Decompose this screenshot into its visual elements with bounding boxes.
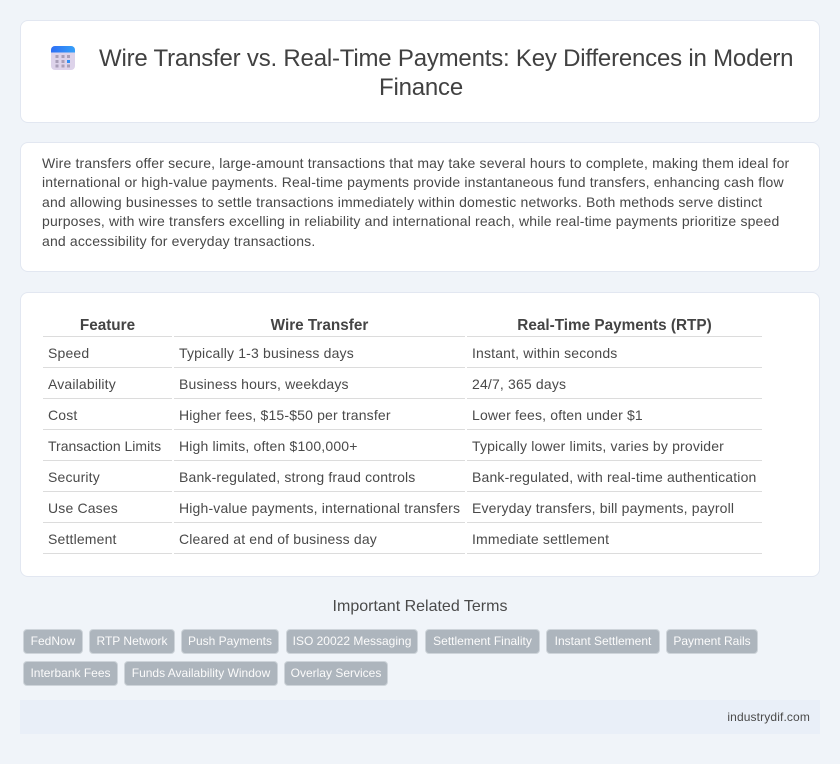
comparison table: High limits, often $100,000+ (179, 438, 358, 454)
comparison table: Wire Transfer (271, 317, 368, 334)
comparison table: Availability (48, 376, 116, 392)
comparison table: Transaction Limits (48, 438, 161, 454)
related terms tags: ISO 20022 Messaging (293, 634, 411, 648)
comparison table: Security (48, 469, 100, 485)
comparison table: Typically lower limits, varies by provider (472, 438, 724, 454)
comparison table: Everyday transfers, bill payments, payroll (472, 500, 734, 516)
comparison table: Instant, within seconds (472, 345, 617, 361)
comparison table: Real-Time Payments (RTP) (517, 317, 712, 334)
comparison table: Cleared at end of business day (179, 531, 377, 547)
text block: intro paragraph: Wire transfers offer secure, large-amount transactions that may take several hours to complete, making them ideal for (42, 155, 789, 171)
footer (20, 700, 820, 734)
comparison table: Bank-regulated, with real-time authentication (472, 469, 756, 485)
icon: calendar (51, 46, 75, 70)
comparison table: Settlement (48, 531, 117, 547)
comparison table: Speed (48, 345, 89, 361)
comparison table: Bank-regulated, strong fraud controls (179, 469, 415, 485)
text block: intro paragraph: and allowing businesses to settle transactions immediately within domestic networks. Both methods serve distinct (42, 194, 762, 210)
related terms tags: Overlay Services (291, 666, 381, 680)
panel: comparison table (20, 292, 820, 577)
text block: intro paragraph: and accessibility for everyday transactions. (42, 233, 315, 249)
panel: intro text (20, 142, 820, 272)
footer source text: industrydif.com (727, 710, 810, 724)
related terms tags: Funds Availability Window (132, 666, 270, 680)
text block: intro paragraph (42, 155, 789, 249)
related terms tags: RTP Network (97, 634, 167, 648)
comparison table: Lower fees, often under $1 (472, 407, 643, 423)
comparison table: Business hours, weekdays (179, 376, 349, 392)
related terms tags: Interbank Fees (30, 666, 111, 680)
title (99, 45, 793, 101)
title: Wire Transfer vs. Real-Time Payments: Key Differences in Modern (99, 45, 793, 72)
related terms tags: FedNow (31, 634, 75, 648)
heading: related terms: Important Related Terms (333, 598, 507, 615)
comparison table: Immediate settlement (472, 531, 609, 547)
comparison table (43, 317, 762, 554)
comparison table: Cost (48, 407, 77, 423)
text block: intro paragraph: purposes, with wire transfers excelling in reliability and international reach, while real-time payments prioritize speed (42, 213, 779, 229)
title: Finance (379, 74, 463, 101)
comparison table: 24/7, 365 days (472, 376, 566, 392)
related terms tags: Push Payments (188, 634, 272, 648)
comparison table: Use Cases (48, 500, 118, 516)
comparison table: Higher fees, $15-$50 per transfer (179, 407, 391, 423)
related terms tags (23, 629, 758, 686)
comparison table: Feature (80, 317, 135, 334)
related terms tags: Payment Rails (673, 634, 751, 648)
related terms tags: Settlement Finality (433, 634, 532, 648)
comparison table: High-value payments, international transfers (179, 500, 460, 516)
panel: header (20, 20, 820, 123)
comparison table: Typically 1-3 business days (179, 345, 354, 361)
related terms tags: Instant Settlement (555, 634, 651, 648)
text block: intro paragraph: international or high-value payments. Real-time payments provide instantaneous fund transfers, enhancing cash flow (42, 174, 784, 190)
